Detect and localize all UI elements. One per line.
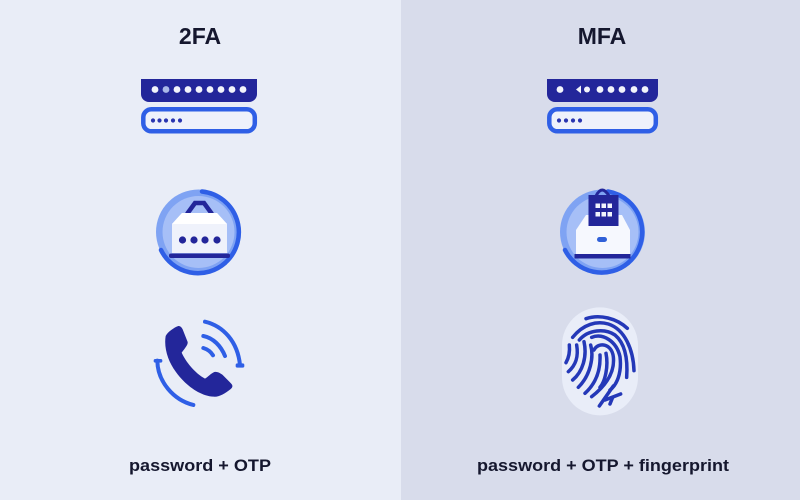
- icon: OTP device in circle: [156, 190, 241, 274]
- icon: password field: [141, 79, 257, 131]
- heading: 2FA: 2FA: [179, 23, 221, 49]
- panel: 2FA: [129, 23, 271, 475]
- icon: authenticator card in tray: [560, 190, 645, 274]
- label: password + OTP + fingerprint: password + OTP + fingerprint: [477, 456, 729, 475]
- heading: MFA: MFA: [578, 23, 626, 49]
- label: password + OTP: password + OTP: [129, 456, 271, 475]
- icon: fingerprint: [562, 307, 638, 415]
- icon: password field: [547, 79, 658, 131]
- icon: phone with signal arcs: [154, 322, 244, 405]
- panel: MFA: [477, 23, 729, 475]
